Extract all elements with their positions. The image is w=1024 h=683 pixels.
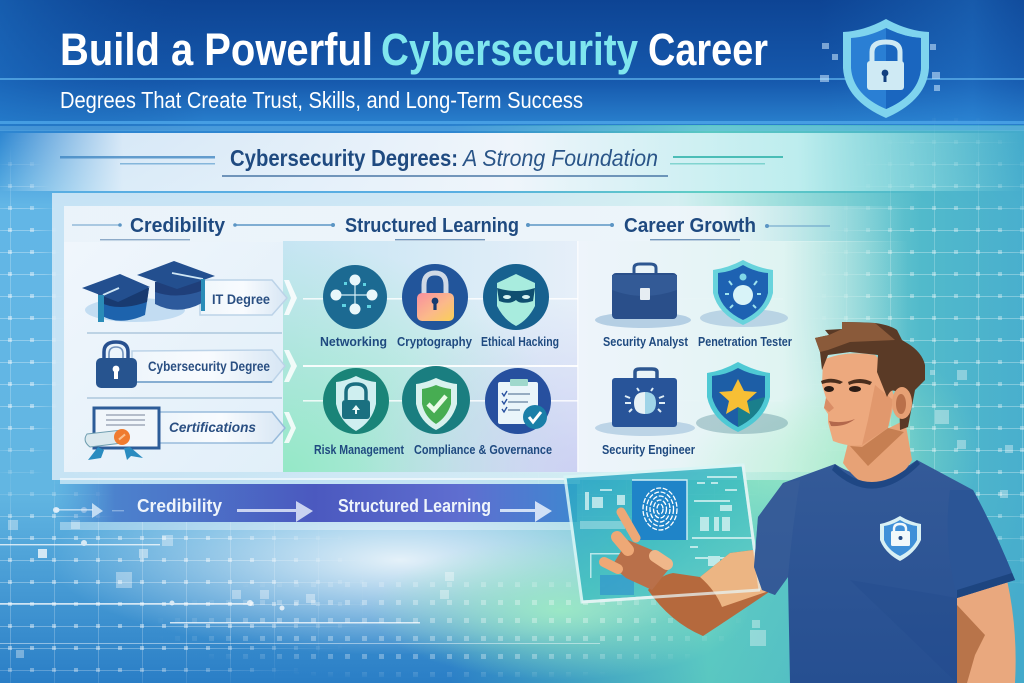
icon: header shield with padlock [820,19,940,118]
icon: engineer briefcase [595,369,695,436]
icon: star shield [696,362,788,434]
left arm pointing at screen [582,465,772,636]
panel: section heading band [0,133,1024,191]
item: Cryptography: Cryptography [397,334,473,349]
icon: padlock [96,342,137,388]
icon: network [323,265,387,329]
panel: credibility column [64,242,283,472]
icon: masked hacker [483,264,549,330]
panel: structured learning column [283,241,783,472]
item: Security Analyst: Security Analyst [603,334,689,349]
arrow tips between columns [284,280,297,443]
column headings: Structured Learning [345,215,519,237]
heading: strong foundation: Cybersecurity Degrees: [230,145,458,171]
title: Build a Powerful [60,24,373,75]
item: Ethical Hacking [481,264,559,349]
flow bar: credibility to structured learning [52,478,580,530]
title: Cybersecurity [381,24,638,75]
row: Certifications [85,408,285,460]
chevron label [132,350,285,382]
right arm [950,580,1016,683]
holographic screen [565,465,760,602]
item: Cryptography [397,264,473,349]
ear [892,387,912,419]
person: cybersecurity professional [582,322,1016,683]
icon: briefcase [595,264,691,328]
column arrows [72,223,830,240]
panel: career growth column [578,241,910,472]
flow bar: credibility to structured learning: Credibility [137,496,222,516]
icon: governance checklist [485,368,551,434]
column headings [130,215,756,237]
item: Penetration Tester: Penetration Tester [698,334,792,349]
column headings: Credibility [130,215,226,237]
hair [815,322,925,430]
title [60,24,768,75]
chevron label [200,280,287,315]
column headings: Career Growth [624,215,756,237]
row: Cybersecurity Degree: Cybersecurity Degree [148,359,270,374]
hand [604,512,668,590]
item: Compliance and Governance [402,366,552,457]
icon: compliance shield [402,366,470,434]
left lead arrow [54,503,124,518]
shirt badge [880,516,921,561]
item: Compliance and Governance: Compliance & Governance [414,442,552,457]
item: Security Analyst [595,264,691,349]
heading: strong foundation: A Strong Foundation [461,145,658,171]
item: Security Engineer: Security Engineer [602,442,695,457]
row: IT Degree [82,261,287,322]
subtitle: Degrees That Create Trust, Skills, and Long-Term Success [60,87,583,113]
arrow [237,501,313,522]
chevron label [158,412,285,443]
item: Networking: Networking [320,334,387,349]
item: Ethical Hacking: Ethical Hacking [481,334,559,349]
arrow [500,501,552,522]
face [822,353,895,446]
fingerprint panel [632,480,687,540]
panel: main degrees table [52,193,922,480]
row: Certifications: Certifications [169,420,256,435]
neck [843,420,912,486]
item: Security Engineer [595,369,695,457]
eyebrows and eyes [821,379,872,392]
icon: risk shield lock [323,368,389,434]
icon: penetration shield [700,260,788,327]
item: Penetration Tester [698,260,792,349]
mouth [829,419,855,426]
flow bar: credibility to structured learning: Structured Learning [338,496,491,516]
item: Networking [320,265,387,349]
title: Career [648,24,768,75]
item: Risk Management [314,368,405,457]
row: IT Degree: IT Degree [212,292,270,307]
t-shirt [754,460,1015,683]
icon: certificate scroll [85,408,159,460]
row: Cybersecurity Degree [96,342,285,388]
item: Risk Management: Risk Management [314,442,405,457]
header band line decoration [0,78,1024,131]
icon: graduation caps [82,261,215,322]
heading: strong foundation [230,145,658,171]
icon: gradient padlock [402,264,468,330]
